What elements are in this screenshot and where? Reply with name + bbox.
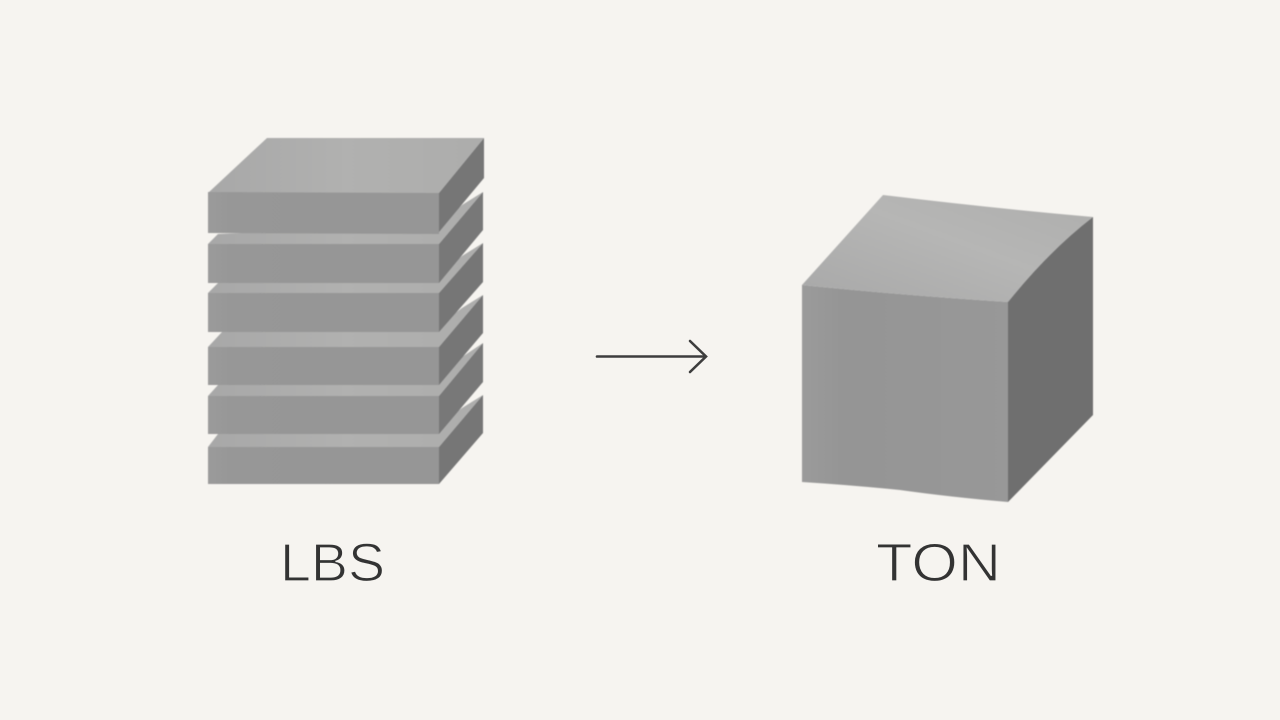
cube front face — [802, 285, 1008, 502]
slab 2 — [208, 192, 483, 283]
label: LBS: LBS — [280, 533, 385, 593]
slab 3 — [208, 243, 483, 332]
slab 5 — [208, 343, 483, 434]
cube side face — [1008, 217, 1093, 502]
arrow — [597, 341, 706, 372]
cube: TON — [802, 195, 1093, 502]
cube top face — [802, 195, 1093, 302]
slab 1 (top) — [208, 138, 484, 234]
slab 6 (bottom) — [208, 395, 483, 484]
stack of slabs: LBS — [208, 138, 484, 484]
label: TON: TON — [876, 533, 1001, 593]
slab 4 — [208, 295, 483, 385]
